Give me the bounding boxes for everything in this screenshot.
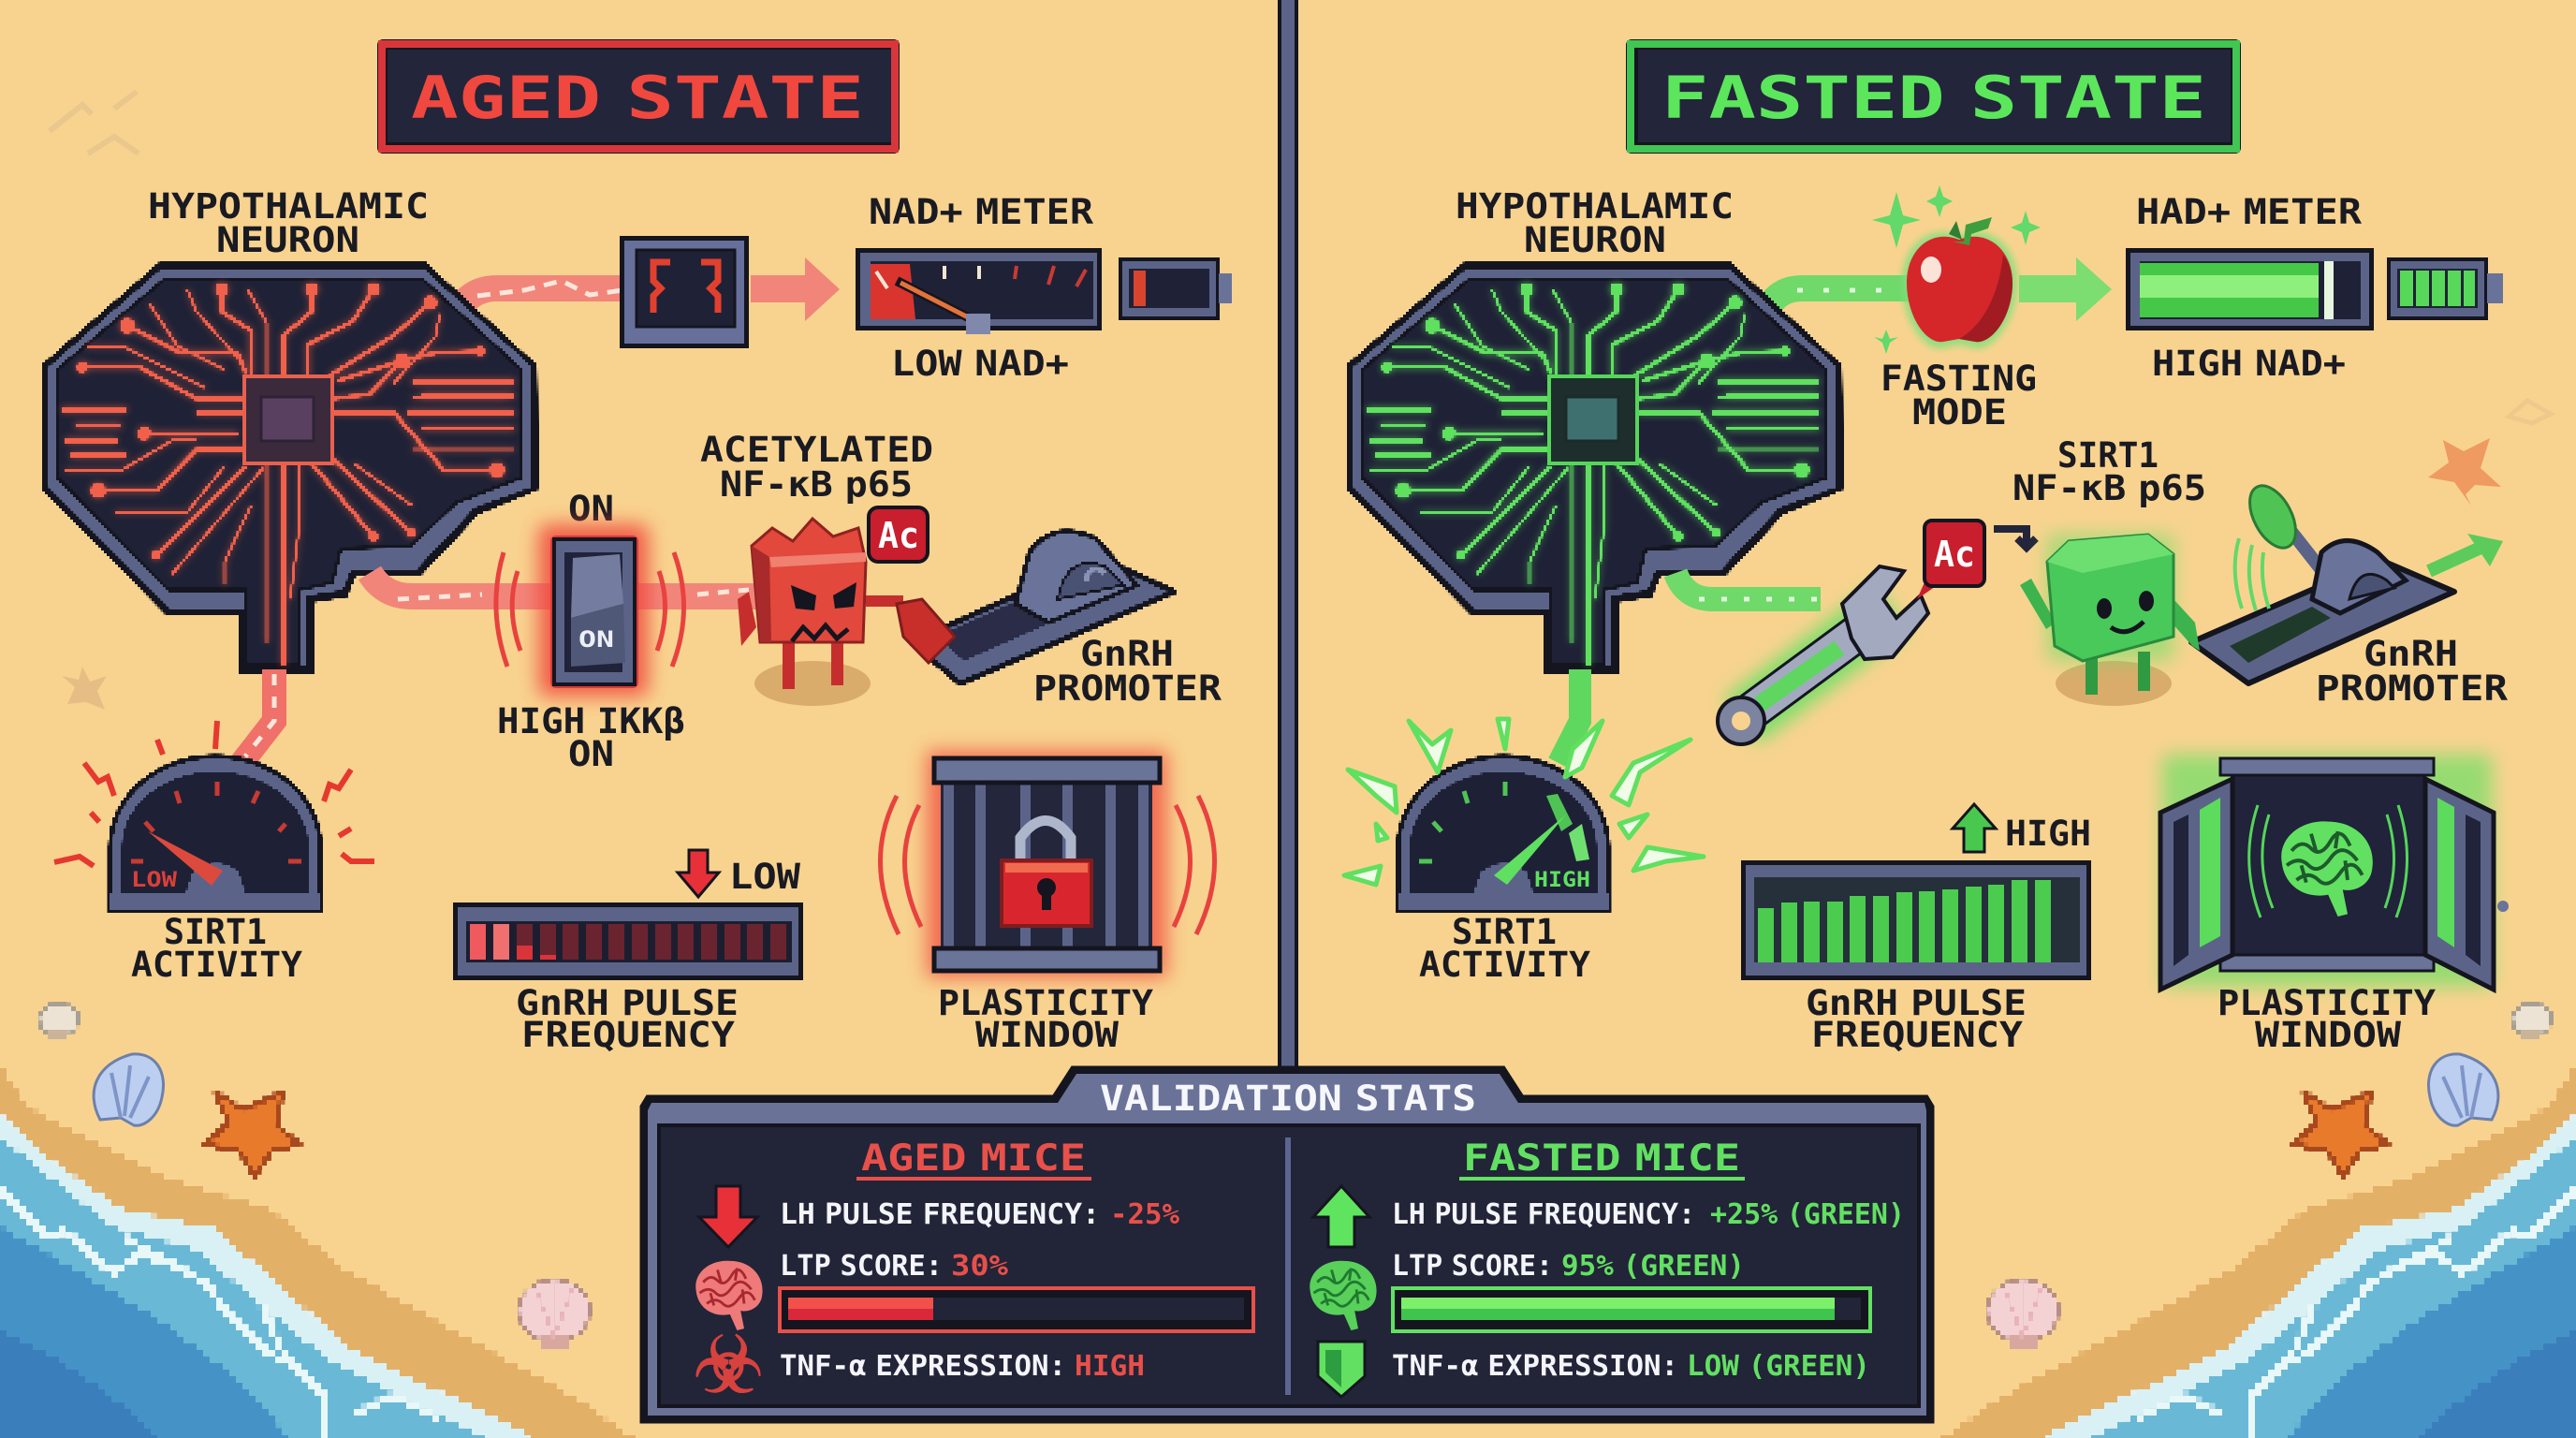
stats title: VALIDATION STATS	[1100, 1078, 1476, 1119]
fasting mode label	[1881, 359, 2037, 433]
red sparks	[54, 721, 374, 866]
right shoreline water	[1921, 1064, 2576, 1438]
high IKK label: HIGH IKKβ	[497, 701, 685, 741]
friendly green character	[2020, 535, 2200, 706]
GnRH promoter label aged: PROMOTER	[1033, 668, 1222, 709]
aged signal band to gate	[459, 281, 622, 309]
icon: biohazard: ☣	[693, 1319, 764, 1411]
plasticity label aged: PLASTICITY	[938, 983, 1154, 1023]
IKK switch	[538, 524, 649, 697]
high IKK label	[497, 701, 685, 774]
GnRH pulse bar fasted	[1741, 860, 2091, 980]
stats divider	[1285, 1137, 1291, 1395]
faint seagulls	[50, 92, 139, 154]
acetylated label: NF-κB p65	[720, 464, 913, 505]
faint sand star	[62, 667, 107, 710]
Ac tag on wrench: Ac	[1934, 534, 1975, 575]
TNF aged: TNF-α EXPRESSION:	[780, 1350, 1066, 1383]
aged mice column	[693, 1137, 1253, 1411]
GnRH pulse label aged: GnRH PULSE	[516, 983, 739, 1023]
small shell left	[39, 1004, 79, 1038]
aged neuron label: HYPOTHALAMIC	[148, 186, 429, 227]
acetylated label: ACETYLATED	[700, 430, 933, 470]
SIRT1 NF-kB label: SIRT1	[2057, 435, 2159, 476]
brain wave arcs	[2249, 805, 2408, 917]
fasted neuron label: HYPOTHALAMIC	[1456, 186, 1734, 227]
fasted state header	[1626, 39, 2241, 154]
fasted mice heading: FASTED MICE	[1463, 1137, 1740, 1180]
LTP score fasted	[1392, 1250, 1745, 1283]
low NAD label: LOW NAD+	[891, 344, 1069, 384]
IKK switch: ON	[578, 626, 614, 653]
small shell right	[2512, 1004, 2552, 1038]
fasted signal band to wrench	[1676, 573, 1821, 599]
NAD meter label: NAD+ METER	[869, 192, 1094, 232]
left shoreline water	[0, 1064, 655, 1438]
SIRT1 gauge fasted: HIGH	[1534, 869, 1590, 892]
LTP score fasted: LTP SCORE:	[1392, 1250, 1553, 1283]
SIRT1 gauge aged	[110, 756, 320, 910]
aged neuron circuit	[45, 265, 535, 670]
fasting mode label: FASTING	[1881, 359, 2037, 399]
HAD meter label: HAD+ METER	[2136, 192, 2363, 232]
plasticity label fasted	[2217, 983, 2437, 1055]
faint cloud	[2509, 401, 2551, 423]
LH pulse fasted: LH PULSE FREQUENCY:	[1392, 1198, 1695, 1231]
aged arrow to meter	[751, 257, 840, 321]
plasticity label fasted: WINDOW	[2255, 1015, 2402, 1055]
high NAD meter	[2126, 248, 2374, 330]
aged state title: AGED STATE	[411, 64, 864, 132]
GnRH pulse label fasted	[1806, 983, 2027, 1055]
Ac tag red: Ac	[878, 515, 919, 556]
pink shell left	[519, 1280, 590, 1348]
fasting mode label: MODE	[1912, 392, 2007, 433]
locked cage	[927, 751, 1167, 977]
curved removal arrow	[1994, 529, 2036, 548]
fasted neuron label	[1456, 186, 1734, 260]
faint orange star	[2428, 438, 2501, 506]
high IKK label: ON	[568, 734, 614, 774]
GnRH pulse bar aged	[453, 902, 803, 980]
fasted signal to gauge	[1559, 669, 1580, 763]
LH pulse fasted	[1392, 1198, 1905, 1231]
icon: down arrow	[699, 1186, 757, 1247]
SIRT1 gauge fasted	[1398, 756, 1608, 910]
high arrow	[1953, 804, 1996, 852]
SIRT1 NF-kB label	[2012, 435, 2206, 508]
wrench	[1718, 566, 1928, 744]
Ac tag on wrench	[1917, 521, 1984, 599]
GnRH promoter label fasted	[2316, 634, 2509, 709]
low arrow	[678, 850, 719, 897]
GnRH pulse label fasted: FREQUENCY	[1811, 1015, 2024, 1055]
fasted signal band to apple	[1767, 288, 1910, 309]
lever motion lines	[2235, 538, 2269, 610]
aged signal to gauge	[242, 669, 274, 763]
SIRT1 label fasted: ACTIVITY	[1419, 945, 1591, 985]
low label: LOW	[729, 857, 801, 897]
icon: green brain	[1310, 1261, 1377, 1330]
aged mice heading: AGED MICE	[861, 1137, 1086, 1180]
SIRT1 gauge aged: LOW	[131, 869, 178, 892]
angry red character	[738, 519, 955, 706]
GnRH promoter label aged	[1033, 634, 1222, 709]
plasticity label fasted: PLASTICITY	[2217, 983, 2437, 1023]
LTP score fasted: 95% (GREEN)	[1561, 1250, 1745, 1283]
blue shell left	[94, 1054, 164, 1125]
fasted arrow to meter	[2019, 257, 2112, 321]
starfish left	[205, 1092, 300, 1176]
SIRT1 label fasted	[1419, 912, 1591, 985]
GnRH promoter label fasted: GnRH	[2364, 634, 2458, 674]
GnRH promoter lever fasted	[2191, 478, 2503, 683]
LH pulse fasted: +25% (GREEN)	[1710, 1198, 1905, 1231]
plasticity label aged: WINDOW	[975, 1015, 1120, 1055]
aged signal band to switch	[370, 573, 758, 599]
LTP bar aged	[780, 1288, 1253, 1331]
LH pulse aged: LH PULSE FREQUENCY:	[780, 1198, 1100, 1231]
GnRH promoter label aged: GnRH	[1080, 634, 1174, 674]
high NAD label: HIGH NAD+	[2152, 344, 2346, 384]
GnRH promoter lever aged	[912, 532, 1174, 683]
green sparks	[1344, 719, 1704, 885]
pink shell right	[1987, 1280, 2058, 1348]
GnRH promoter label fasted: PROMOTER	[2316, 668, 2509, 709]
open window	[2160, 755, 2509, 990]
LTP score aged: LTP SCORE:	[780, 1250, 943, 1283]
TNF fasted: LOW (GREEN)	[1687, 1350, 1870, 1383]
blue shell right	[2428, 1054, 2498, 1125]
Ac tag red	[869, 507, 928, 562]
validation stats panel	[642, 1068, 1932, 1421]
full battery	[2387, 257, 2503, 320]
aged neuron label: NEURON	[216, 220, 359, 260]
GnRH pulse label fasted: GnRH PULSE	[1806, 983, 2027, 1023]
GnRH pulse label aged: FREQUENCY	[521, 1015, 736, 1055]
LTP score aged: 30%	[951, 1250, 1008, 1283]
TNF fasted	[1392, 1350, 1870, 1383]
SIRT1 NF-kB label: NF-κB p65	[2012, 468, 2206, 508]
on label: ON	[568, 489, 614, 529]
low battery	[1119, 257, 1232, 320]
SIRT1 label aged: SIRT1	[164, 912, 267, 952]
SIRT1 label fasted: SIRT1	[1452, 912, 1557, 952]
fasted neuron label: NEURON	[1524, 220, 1666, 260]
apple fasting icon	[1902, 217, 2017, 348]
cage alarm arcs	[880, 796, 1215, 934]
LH pulse aged: -25%	[1110, 1198, 1179, 1231]
plasticity label aged	[938, 983, 1154, 1055]
glowing brain	[2281, 821, 2373, 917]
sparkles	[1872, 185, 2041, 354]
low NAD meter	[856, 248, 1102, 334]
starfish right	[2293, 1092, 2388, 1176]
fasted state title: FASTED STATE	[1661, 64, 2206, 132]
TNF aged: HIGH	[1075, 1350, 1145, 1383]
high label: HIGH	[2005, 814, 2091, 854]
aged state header	[377, 39, 900, 154]
acetylated label	[700, 430, 933, 505]
SIRT1 label aged: ACTIVITY	[131, 945, 303, 985]
GnRH pulse label aged	[516, 983, 739, 1055]
center divider	[1278, 0, 1298, 1073]
switch vibration arcs	[496, 552, 684, 667]
icon: shield	[1318, 1342, 1365, 1397]
fasted neuron circuit	[1350, 265, 1840, 670]
aged gate box	[620, 236, 749, 348]
fasted mice column	[1310, 1137, 1905, 1397]
SIRT1 label aged	[131, 912, 303, 985]
aged neuron label	[148, 186, 429, 260]
icon: red brain	[695, 1261, 763, 1330]
LTP bar fasted	[1393, 1288, 1870, 1331]
icon: up arrow	[1313, 1186, 1369, 1247]
TNF fasted: TNF-α EXPRESSION:	[1392, 1350, 1678, 1383]
